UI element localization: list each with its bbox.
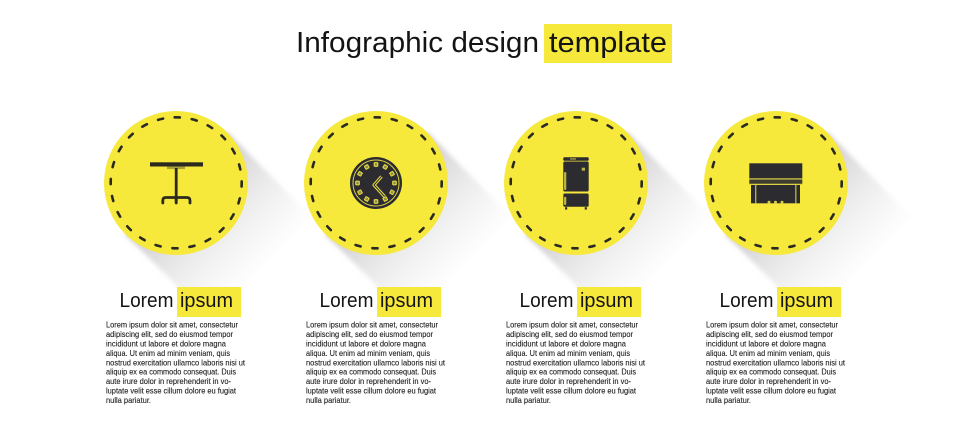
- text block: Lorem ipsum dolor sit amet, consectetur: [706, 320, 838, 330]
- heading: Lorem: [520, 290, 574, 312]
- text block: luptate velit esse cillum dolore eu fugiat: [306, 386, 437, 396]
- yellow circle: [304, 111, 448, 255]
- dashed ring: [509, 116, 643, 250]
- text block: aliquip ex ea commodo consequat. Duis: [106, 367, 236, 377]
- yellow circle: [504, 111, 648, 255]
- text block: aute irure dolor in reprehenderit in vo-: [706, 376, 831, 386]
- text block: adipiscing elit, sed do eiusmod tempor: [506, 329, 633, 339]
- text block: incididunt ut labore et dolore magna: [706, 338, 826, 348]
- heading: [520, 287, 641, 317]
- heading: ipsum: [180, 290, 233, 312]
- text block: incididunt ut labore et dolore magna: [506, 338, 626, 348]
- text block: Lorem ipsum dolor sit amet, consectetur: [106, 320, 238, 330]
- text block: aute irure dolor in reprehenderit in vo-: [106, 376, 231, 386]
- text block: aute irure dolor in reprehenderit in vo-: [506, 376, 631, 386]
- heading: ipsum: [780, 290, 833, 312]
- text block: luptate velit esse cillum dolore eu fugiat: [506, 386, 637, 396]
- text block: nulla pariatur.: [706, 395, 751, 405]
- text block: nulla pariatur.: [306, 395, 351, 405]
- text block: luptate velit esse cillum dolore eu fugiat: [106, 386, 237, 396]
- dashed ring: [109, 116, 243, 250]
- icon: refrigerator: [563, 157, 589, 210]
- text block: incididunt ut labore et dolore magna: [306, 338, 426, 348]
- title: Infographic design: [296, 27, 539, 59]
- text block: aliqua. Ut enim ad minim veniam, quis: [106, 348, 230, 358]
- text block: aliqua. Ut enim ad minim veniam, quis: [706, 348, 830, 358]
- text block: nostrud exercitation ullamco laboris nisi ut: [706, 357, 846, 367]
- text block: luptate velit esse cillum dolore eu fugiat: [706, 386, 837, 396]
- icon: table: [150, 162, 203, 203]
- text block: adipiscing elit, sed do eiusmod tempor: [106, 329, 233, 339]
- text block: nostrud exercitation ullamco laboris nisi ut: [106, 357, 246, 367]
- text block: Lorem ipsum dolor sit amet, consectetur: [506, 320, 638, 330]
- text block: adipiscing elit, sed do eiusmod tempor: [706, 329, 833, 339]
- panel: refrigerator: [504, 111, 712, 405]
- title: template: [549, 27, 667, 59]
- text block: Lorem ipsum dolor sit amet, consectetur: [306, 320, 438, 330]
- text block: [706, 320, 846, 405]
- title: [296, 24, 672, 63]
- heading: Lorem: [320, 290, 374, 312]
- text block: nostrud exercitation ullamco laboris nisi ut: [306, 357, 446, 367]
- text block: [106, 320, 246, 405]
- text block: aliquip ex ea commodo consequat. Duis: [306, 367, 436, 377]
- heading: [320, 287, 441, 317]
- text block: aliquip ex ea commodo consequat. Duis: [506, 367, 636, 377]
- long shadow: [325, 132, 512, 319]
- icon: wall clock: [350, 157, 402, 209]
- text block: incididunt ut labore et dolore magna: [106, 338, 226, 348]
- heading: Lorem: [720, 290, 774, 312]
- long shadow: [525, 132, 712, 319]
- text block: [506, 320, 646, 405]
- heading: Lorem: [120, 290, 174, 312]
- dashed ring: [709, 116, 843, 250]
- icon: piano: [749, 163, 802, 204]
- heading: [120, 287, 241, 317]
- text block: nostrud exercitation ullamco laboris nisi ut: [506, 357, 646, 367]
- long shadow: [725, 132, 912, 319]
- text block: aute irure dolor in reprehenderit in vo-: [306, 376, 431, 386]
- heading: ipsum: [380, 290, 433, 312]
- text block: nulla pariatur.: [106, 395, 151, 405]
- text block: adipiscing elit, sed do eiusmod tempor: [306, 329, 433, 339]
- text block: nulla pariatur.: [506, 395, 551, 405]
- heading: ipsum: [580, 290, 633, 312]
- text block: aliqua. Ut enim ad minim veniam, quis: [506, 348, 630, 358]
- panel: clock: [304, 111, 512, 405]
- heading: [720, 287, 841, 317]
- text block: aliquip ex ea commodo consequat. Duis: [706, 367, 836, 377]
- yellow circle: [704, 111, 848, 255]
- long shadow: [125, 132, 312, 319]
- dashed ring: [309, 116, 443, 250]
- text block: aliqua. Ut enim ad minim veniam, quis: [306, 348, 430, 358]
- panel: table: [104, 111, 312, 405]
- panel: piano: [704, 111, 912, 405]
- text block: [306, 320, 446, 405]
- yellow circle: [104, 111, 248, 255]
